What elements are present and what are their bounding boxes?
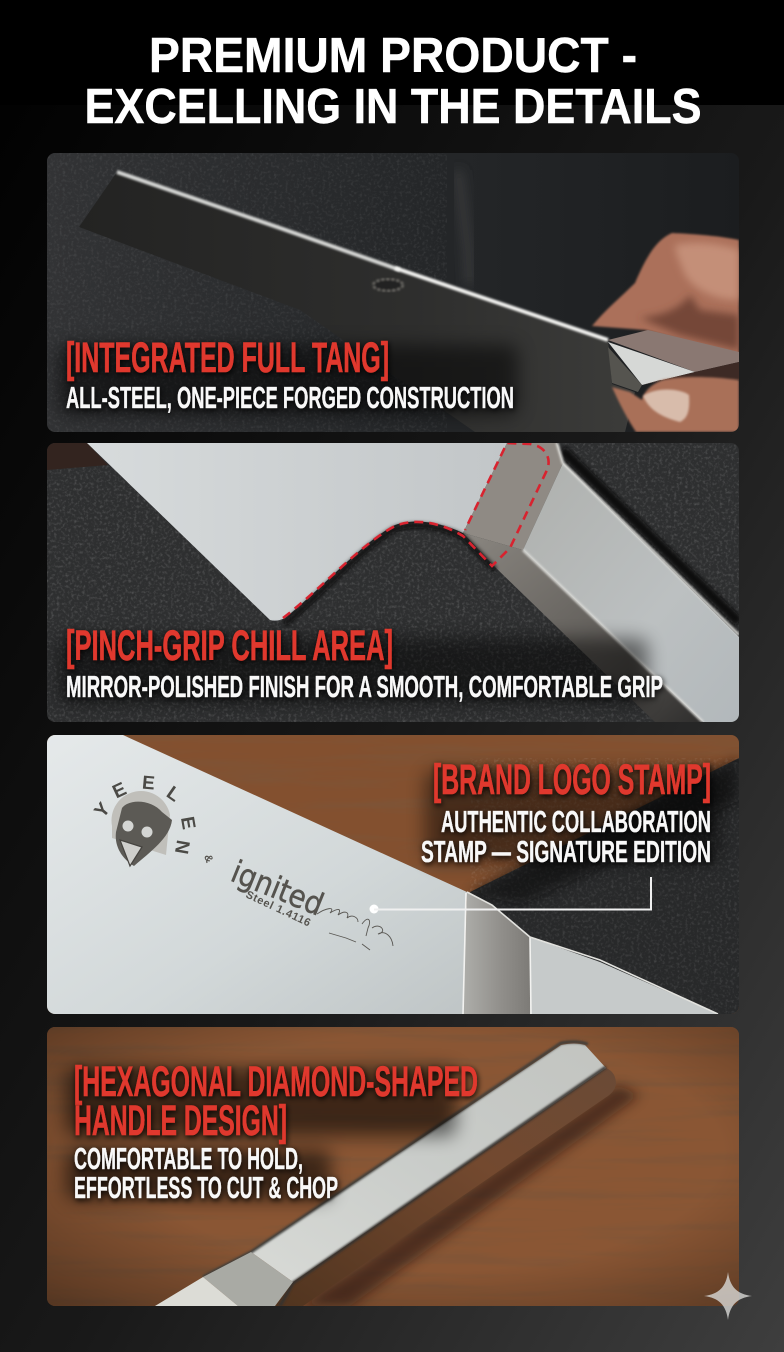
dark blade [79,172,635,432]
logo: viking head: Y [91,799,115,822]
handle [530,937,718,1014]
title [84,29,702,134]
title: EXCELLING IN THE DETAILS [84,80,702,134]
logo: viking head: E [109,779,130,803]
lower handle facet [463,533,703,722]
text shade [58,345,518,415]
engraving: ignited: ignited [226,854,328,923]
text shade [66,1068,456,1200]
panel: pinch-grip chill area [47,443,739,722]
panel: integrated full tang [47,153,739,432]
description [421,804,711,869]
logo: viking head: E [141,773,156,795]
steel handle [608,330,739,372]
red dashed outline [283,443,549,618]
logo: viking head: N [170,838,193,856]
text shade [58,638,648,704]
thumb [612,377,739,432]
title: PREMIUM PRODUCT - [149,29,637,83]
handle lower facet [270,1068,616,1306]
heading: [HEXAGONAL DIAMOND-SHAPED [74,1058,478,1106]
icon: sparkle [704,1272,752,1320]
handle top face [523,463,739,722]
handle top face [251,1044,606,1282]
heading: [PINCH-GRIP CHILL AREA] [66,622,393,670]
logo: viking head: L [162,783,184,807]
logo: viking head: E [176,815,199,831]
heading [74,1058,478,1145]
text shade [425,770,720,862]
bolster [203,1252,293,1306]
dark slate area [470,758,739,1014]
handle shadow [300,1085,640,1306]
logo: viking head [91,773,199,866]
blade shadow curve [285,526,495,624]
hand [592,233,739,357]
bolster highlights [463,892,718,1014]
panel: brand logo stamp [47,735,739,1014]
handle top edge [557,443,739,635]
bolster [463,443,563,550]
heading: [INTEGRATED FULL TANG] [66,334,389,382]
tang logo mark [373,279,403,291]
handle top edge [203,1042,588,1277]
handle lower edge [280,1067,606,1306]
description: COMFORTABLE TO HOLD, [74,1141,303,1176]
description [74,1141,338,1205]
blade [47,735,467,1014]
bolster [463,892,530,1014]
heading: HANDLE DESIGN] [74,1097,287,1145]
panel: hexagonal handle design [47,1027,739,1306]
leader line [370,877,651,914]
signature [317,909,393,950]
engraving: ignited: & [201,853,215,865]
handle lower edge highlight [523,550,703,722]
engraving: ignited: Steel 1.4116 [244,889,312,929]
blade [87,443,507,621]
blade spine highlight [117,172,608,340]
handle shadow [562,450,739,622]
description: EFFORTLESS TO CUT & CHOP [74,1170,338,1205]
